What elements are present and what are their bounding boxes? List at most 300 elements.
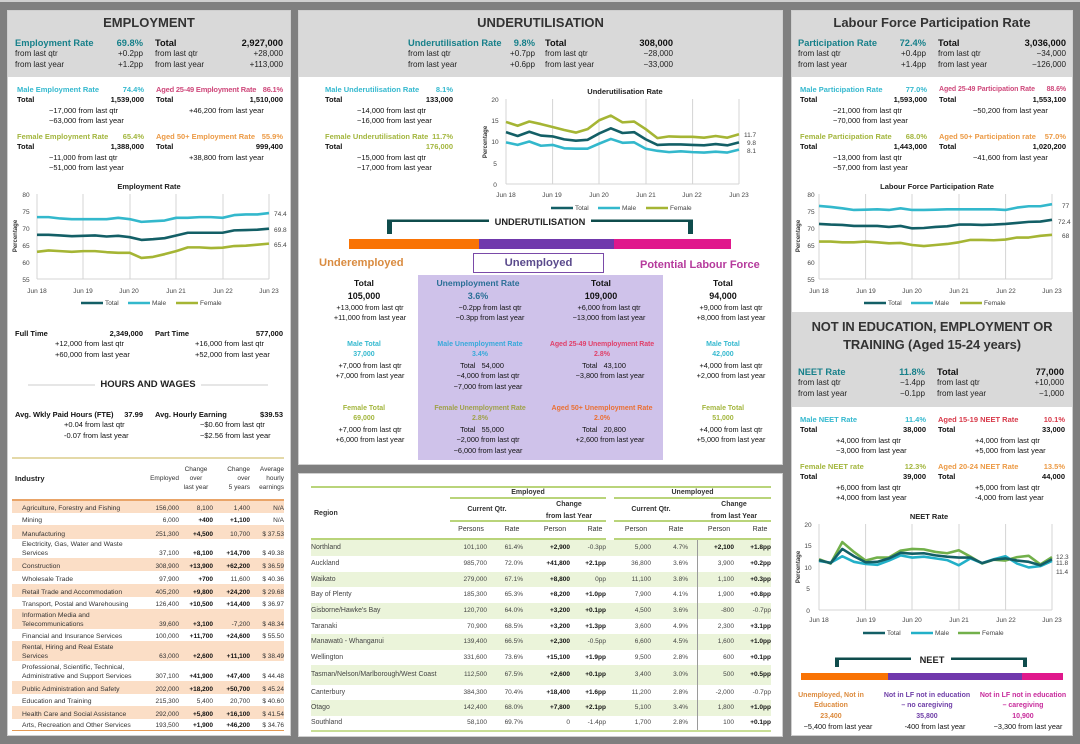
table: industry: +9,800 [193, 588, 213, 596]
table: regions: 68.0% [505, 704, 523, 711]
chart: labour force participation rate: Labour Force Participation Rate [880, 182, 994, 191]
aged 20-24 NEET [938, 462, 1065, 504]
male underutilisation: Total [325, 95, 342, 104]
chart: labour force participation rate: Jun 18 [809, 288, 829, 295]
table: regions: 3.6% [673, 560, 688, 567]
table: industry: $ 49.38 [262, 550, 284, 556]
table: regions: 68.5% [505, 622, 523, 630]
chart: underutilisation rate: 10 [491, 139, 499, 146]
table: industry: 156,000 [156, 504, 179, 512]
aged 25-49 unemployment: −3,800 from last year [576, 371, 644, 380]
table: regions: +2,300 [550, 638, 570, 645]
underutilisation total summary: Total [545, 38, 567, 48]
NEET: unemployed, not in education: 23,400 [820, 713, 842, 720]
table: industry: +24,200 [226, 588, 250, 596]
male unemployment: Total 54,000 [460, 361, 504, 370]
underutilisation total summary: 308,000 [639, 38, 673, 48]
NEET: not in labour force, no caregiving [872, 691, 982, 733]
potential labour force male: Male Total [706, 341, 740, 348]
chart: labour force participation rate: Percentage [796, 219, 802, 252]
table: industry: +18,200 [189, 686, 213, 692]
aged 50+ employment: 55.9% [262, 132, 283, 141]
potential labour force male: 42,000 [712, 351, 734, 358]
table: industry: Services [22, 652, 48, 660]
NEET: not in labour force, no caregiving: -400 from last year [905, 722, 965, 731]
male participation: −70,000 from last year [833, 116, 908, 125]
chart: labour force participation rate [796, 182, 1071, 307]
aged 25-49 unemployment [550, 340, 654, 380]
male underutilisation: −16,000 from last year [357, 116, 432, 125]
table: regions: -0.3pp [588, 544, 606, 551]
aged 25-49 employment: Aged 25-49 Employment Rate [156, 85, 256, 94]
male participation: −21,000 from last qtr [833, 106, 902, 115]
table: industry: Change [185, 466, 207, 473]
female employment: Female Employment Rate [17, 132, 108, 141]
table: industry: Public Administration and Safety [22, 686, 119, 692]
table: regions: 70.4% [505, 689, 523, 696]
male unemployment: 3.4% [472, 351, 488, 358]
table: regions: +8,200 [550, 591, 570, 598]
chart: employment rate: 55 [22, 277, 30, 284]
aged 25-49 participation: −50,200 from last year [973, 106, 1048, 115]
aged 25-49 unemployment: 2.8% [594, 351, 610, 358]
table: regions: 65.3% [505, 591, 523, 598]
chart: NEET rate: 10 [804, 565, 812, 572]
table: industry: $ 40.36 [262, 576, 284, 582]
table: industry: +10,500 [189, 601, 213, 608]
full time: Full Time [15, 329, 48, 338]
underutilisation total summary: −33,000 [644, 60, 673, 68]
female unemployment: −6,000 from last year [454, 446, 522, 455]
aged 50+ participation: Aged 50+ Participation rate [939, 132, 1036, 141]
female unemployment: Total 55,000 [460, 425, 504, 434]
heading: labour force participation rate: Labour Force Participation Rate [833, 15, 1031, 30]
table: industry: 63,000 [159, 652, 179, 660]
average weekly paid hours: Avg. Wkly Paid Hours (FTE) [15, 410, 113, 419]
legend: Female [984, 300, 1006, 307]
female employment: 65.4% [123, 132, 144, 141]
table: regions: 1,900 [718, 591, 734, 598]
table: regions: +1.0pp [585, 591, 606, 598]
table: industry: over [190, 475, 202, 482]
female participation: 68.0% [906, 132, 927, 141]
NEET: unemployed, not in education [783, 691, 879, 733]
table: industry: $ 34.76 [262, 722, 284, 728]
female underutilisation: Total [325, 142, 342, 151]
chart: employment rate [12, 182, 287, 307]
unemployment rate: 3.6% [468, 291, 488, 301]
table: regions: +2,900 [550, 544, 570, 551]
table: industry: N/A [273, 504, 284, 512]
table: regions [311, 540, 771, 732]
potential labour force male: +4,000 from last qtr [699, 361, 763, 370]
table: industry: +47,400 [226, 672, 250, 680]
table: regions: +2,100 [714, 544, 734, 551]
table: industry: Average [260, 466, 284, 473]
part time [155, 329, 283, 359]
potential labour force total: Total [713, 278, 733, 288]
employment rate summary: Employment Rate [15, 38, 94, 48]
potential labour force total: +9,000 from last qtr [699, 303, 763, 312]
female participation: −57,000 from last year [833, 163, 908, 172]
table: regions: +0.5pp [750, 671, 771, 678]
aged 25-49 participation [939, 86, 1066, 115]
chart: NEET rate: 11.4 [1056, 569, 1069, 576]
bracket: underutilisation: UNDERUTILISATION [495, 217, 586, 227]
participation rate summary: +1.4pp [901, 60, 926, 68]
table: industry: 215,300 [156, 698, 179, 705]
chart: labour force participation rate: Jun 19 [856, 288, 876, 295]
table: industry: 5 years [229, 484, 250, 491]
chart: employment rate: 70 [22, 226, 30, 233]
table: regions: +1.9pp [585, 654, 606, 660]
NEET rate summary: from last year [798, 388, 847, 398]
legend [81, 300, 222, 307]
table: regions: 985,700 [464, 560, 487, 567]
regional table header: Region [314, 510, 338, 517]
table: regions: 1,800 [718, 704, 734, 711]
table: regions: Tasman/Nelson/Marlborough/West Coast [311, 671, 436, 678]
unemployed total [573, 278, 646, 322]
table: regions: Southland [311, 719, 342, 726]
line: female [506, 116, 739, 138]
table: industry: N/A [273, 517, 284, 524]
female participation: −13,000 from last qtr [833, 153, 902, 162]
aged 25-49 employment [156, 85, 283, 115]
line: male [819, 204, 1052, 210]
employment rate summary [15, 38, 143, 68]
chart: NEET rate: 11.8 [1056, 560, 1069, 567]
NEET rate summary: −0.1pp [900, 388, 925, 398]
chart: NEET rate [792, 510, 1072, 640]
aged 50+ unemployment: +2,600 from last year [576, 435, 644, 444]
table: industry: +4,500 [193, 530, 213, 538]
aged 25-49 employment: Total [156, 95, 173, 104]
heading: not in education, employment or training: NOT IN EDUCATION, EMPLOYMENT OR [812, 319, 1052, 334]
table: regions: Manawatū - Whanganui [311, 638, 384, 645]
NEET total summary: +10,000 [1035, 378, 1064, 387]
table: regions: +0.1pp [750, 654, 771, 660]
male participation: 1,593,000 [894, 95, 927, 104]
table: industry: +400 [198, 517, 213, 524]
average weekly paid hours: -0.07 from last year [64, 431, 129, 440]
aged 25-49 employment: 86.1% [263, 85, 283, 94]
table: industry: 100,000 [156, 633, 179, 640]
legend: Male [935, 630, 949, 637]
table: industry: 1,400 [234, 504, 250, 512]
chart: labour force participation rate: 80 [807, 192, 815, 199]
table: regions: 3,900 [718, 560, 734, 567]
aged 50+ unemployment [552, 404, 652, 444]
male NEET: Male NEET Rate [800, 415, 857, 424]
chart: NEET rate: Jun 18 [809, 617, 829, 624]
aged 20-24 NEET: -4,000 from last year [975, 493, 1044, 502]
aged 50+ employment: 999,400 [256, 142, 283, 151]
NEET rate summary: −1.4pp [900, 378, 925, 387]
table: industry: 20,700 [230, 698, 250, 705]
table: industry: Transport, Postal and Warehousing [22, 601, 128, 608]
male NEET: 38,000 [903, 425, 926, 434]
chart: NEET rate: Jun 21 [949, 617, 969, 624]
NEET segmented bar [801, 673, 1063, 680]
chart: underutilisation rate: Percentage [483, 125, 489, 158]
unemployed total: 109,000 [585, 291, 617, 301]
underutilisation header [299, 11, 782, 77]
chart: employment rate: Jun 19 [73, 288, 93, 295]
top strip [0, 0, 1080, 2]
table: regions: Waikato [311, 576, 336, 582]
chart: underutilisation rate: Jun 18 [496, 192, 516, 199]
chart: NEET rate: 5 [806, 586, 810, 593]
table: industry: earnings [259, 484, 284, 491]
table: industry: 6,000 [163, 517, 179, 524]
legend: Total [888, 300, 902, 307]
NEET rate summary: NEET Rate [798, 367, 846, 377]
aged 20-24 NEET: Total [938, 472, 955, 481]
table: industry: 307,100 [156, 672, 179, 680]
table: industry: Administrative and Support Services [22, 672, 132, 680]
table: regions: 66.5% [505, 638, 523, 645]
unemployed total: −13,000 from last year [573, 313, 645, 322]
chart: NEET rate: Percentage [796, 550, 802, 583]
table: regions: +1.0pp [750, 704, 771, 711]
aged 50+ employment: +38,800 from last year [189, 153, 264, 162]
label: underemployed: Underemployed [319, 257, 404, 269]
aged 25-49 unemployment: Total 43,100 [582, 361, 626, 370]
aged 15-19 NEET: Aged 15-19 NEET Rate [938, 415, 1018, 424]
aged 15-19 NEET: 10.1% [1044, 415, 1065, 424]
table: industry: Industry [15, 474, 45, 483]
regional table header: Employed [511, 489, 545, 496]
table: regions: -0.7pp [753, 607, 771, 614]
employment rate summary: +0.2pp [118, 49, 143, 58]
table: industry: +41,900 [189, 672, 213, 680]
table: regions: Northland [311, 544, 341, 551]
aged 20-24 NEET: Aged 20-24 NEET Rate [938, 462, 1018, 471]
female employment [17, 132, 144, 172]
table: regions: +3.1pp [750, 622, 771, 630]
participation total summary: −34,000 [1037, 49, 1066, 58]
table: industry: Mining [22, 517, 42, 524]
regional table header: Rate [505, 526, 519, 533]
table: regions: +2.1pp [585, 704, 606, 711]
female participation: 1,443,000 [894, 142, 927, 151]
female employment: 1,388,000 [111, 142, 144, 151]
table: industry: hourly [266, 475, 284, 482]
potential labour force female: Female Total [702, 405, 744, 412]
underutilisation total summary: from last year [545, 60, 594, 68]
bracket: NEET: NEET [920, 655, 945, 665]
table: industry: +16,100 [226, 711, 250, 718]
potential labour force female [697, 404, 766, 444]
regional table header: Change [721, 501, 747, 508]
participation rate summary: Participation Rate [798, 38, 877, 48]
chart: labour force participation rate: 55 [807, 277, 815, 284]
table: regions: 3.4% [673, 704, 688, 711]
potential labour force male: +2,000 from last year [697, 371, 765, 380]
regional table header: Rate [669, 526, 683, 533]
aged 15-19 NEET: Total [938, 425, 955, 434]
table: regions: 3,600 [635, 622, 651, 630]
female participation: Female Participation Rate [800, 132, 892, 141]
male employment: Male Employment Rate [17, 85, 99, 94]
NEET: unemployed, not in education: −5,400 from last year [804, 722, 872, 731]
panel: regional table [299, 474, 782, 736]
table: industry: Professional, Scientific, Technical, [22, 664, 124, 670]
line: male [37, 213, 269, 222]
NEET total summary: from last qtr [937, 378, 980, 387]
potential labour force female: +5,000 from last year [697, 435, 765, 444]
NEET: unemployed, not in education: Unemployed, Not in [798, 692, 864, 699]
underemployed female: +6,000 from last year [336, 435, 404, 444]
table: regions: +1.6pp [585, 689, 606, 696]
chart: NEET rate: NEET Rate [910, 512, 948, 521]
male participation: Total [800, 95, 817, 104]
employment total summary: from last qtr [155, 49, 198, 58]
NEET total summary: Total [937, 367, 959, 377]
underemployed total [334, 278, 406, 322]
NEET: not in labour force, no caregiving: 35,800 [916, 713, 938, 720]
table: industry: 202,000 [156, 686, 179, 692]
female unemployment: Female Unemployment Rate [434, 405, 526, 412]
table: regions: 500 [723, 671, 734, 678]
NEET rate summary [798, 366, 925, 399]
employment total summary [155, 38, 283, 68]
potential labour force male [697, 340, 766, 380]
regional table header: Current Qtr. [467, 506, 507, 513]
employment total summary: Total [155, 38, 177, 48]
underutilisation rate summary: +0.6pp [510, 60, 535, 68]
chart: employment rate: 65 [22, 243, 30, 250]
table: industry: 308,900 [156, 562, 179, 570]
average hourly earning: $39.53 [260, 410, 283, 419]
female NEET: Female NEET rate [800, 462, 864, 471]
table: regions: Gisborne/Hawke's Bay [311, 607, 380, 614]
table: regions: -800 [721, 607, 734, 614]
female underutilisation: −15,000 from last qtr [357, 153, 426, 162]
aged 50+ participation [939, 132, 1066, 162]
panel: underutilisation [299, 11, 782, 464]
underutilisation rate summary [408, 38, 535, 68]
female NEET: 12.3% [905, 462, 926, 471]
underemployed total: 105,000 [348, 291, 380, 301]
aged 50+ employment: Total [156, 142, 173, 151]
table: regions: Wellington [311, 654, 343, 660]
line: total [819, 549, 1052, 565]
NEET total summary [937, 366, 1064, 399]
table: industry: +11,100 [227, 652, 250, 660]
male employment: 1,539,000 [111, 95, 144, 104]
male employment [17, 85, 144, 125]
table: regions: 67.5% [505, 671, 523, 678]
full time: 2,349,000 [110, 329, 143, 338]
NEET header [792, 312, 1072, 407]
underemployed female: 69,000 [353, 415, 375, 422]
table: industry: +13,900 [189, 562, 213, 570]
table: industry: Retail Trade and Accommodation [22, 588, 122, 596]
table: regions: 331,600 [464, 654, 487, 660]
table: industry: $ 41.54 [262, 711, 284, 718]
chart: employment rate: 69.8 [274, 227, 287, 234]
male underutilisation: 133,000 [426, 95, 453, 104]
table: industry: +11,700 [190, 633, 213, 640]
unemployment rate [436, 278, 524, 322]
regional table header: Change [556, 501, 582, 508]
underemployed male: 37,000 [353, 351, 375, 358]
heading: hours and wages: HOURS AND WAGES [100, 379, 196, 390]
table: industry: -7,200 [232, 620, 250, 628]
table: industry: +62,200 [226, 562, 250, 570]
heading: employment: EMPLOYMENT [103, 15, 195, 30]
male NEET: −3,000 from last year [836, 446, 907, 455]
line: female [819, 235, 1052, 246]
employment header [8, 11, 290, 77]
underemployed total: Total [354, 278, 374, 288]
male unemployment: −7,000 from last year [454, 382, 522, 391]
unemployment rate: Unemployment Rate [436, 278, 520, 288]
line: female [819, 542, 1052, 564]
regional table header: Person [708, 526, 730, 533]
female participation [800, 132, 927, 172]
NEET: not in labour force, no caregiving: Not in LF not in education [884, 692, 970, 699]
table: industry: +1,100 [230, 517, 250, 524]
male employment: 74.4% [123, 85, 144, 94]
NEET: not in labour force, caregiving [968, 691, 1078, 733]
chart: employment rate: Percentage [13, 219, 19, 252]
chart: underutilisation rate: Jun 23 [729, 192, 749, 199]
NEET: not in labour force, no caregiving: – no caregiving [901, 702, 953, 709]
table: regions: +2.1pp [585, 560, 606, 567]
table: industry: $ 40.60 [262, 698, 284, 705]
table: regions: Bay of Plenty [311, 591, 352, 598]
employment total summary: from last year [155, 60, 204, 68]
table: regions: +0.2pp [750, 560, 771, 567]
legend: Female [670, 205, 692, 212]
aged 25-49 employment: +46,200 from last year [189, 106, 264, 115]
chart: NEET rate: Jun 22 [996, 617, 1016, 624]
table: industry: +700 [198, 576, 213, 582]
female employment: Total [17, 142, 34, 151]
potential labour force female: 51,000 [712, 415, 734, 422]
legend: Total [105, 300, 119, 307]
full time: +12,000 from last qtr [55, 339, 124, 348]
unemployed total: +6,000 from last qtr [577, 303, 641, 312]
chart: NEET rate: Jun 23 [1042, 617, 1062, 624]
table: regions: 4.7% [673, 544, 688, 551]
chart: employment rate: 74.4 [274, 211, 287, 218]
male unemployment: Male Unemployment Rate [437, 341, 523, 348]
table: regions: 112,500 [464, 671, 487, 678]
aged 50+ employment: Aged 50+ Employment Rate [156, 132, 255, 141]
table: industry: 405,200 [156, 588, 179, 596]
line: male [506, 139, 739, 153]
employment total summary: +113,000 [250, 60, 283, 68]
aged 15-19 NEET: 33,000 [1042, 425, 1065, 434]
panel: participation and NEET [792, 11, 1072, 735]
table: regions: 2.8% [673, 719, 688, 726]
aged 25-49 unemployment: Aged 25-49 Unemployment Rate [550, 341, 654, 348]
table: regions: 36,800 [631, 560, 651, 567]
regional table header: from last Year [711, 512, 757, 520]
table: regions: +7,800 [550, 704, 570, 711]
female participation: Total [800, 142, 817, 151]
table: industry: 251,300 [156, 530, 179, 538]
table: industry: 5,400 [197, 698, 213, 705]
male unemployment: −4,000 from last qtr [456, 371, 520, 380]
female underutilisation: −17,000 from last year [357, 163, 432, 172]
table: industry: 97,900 [159, 576, 179, 582]
aged 50+ participation: Total [939, 142, 956, 151]
